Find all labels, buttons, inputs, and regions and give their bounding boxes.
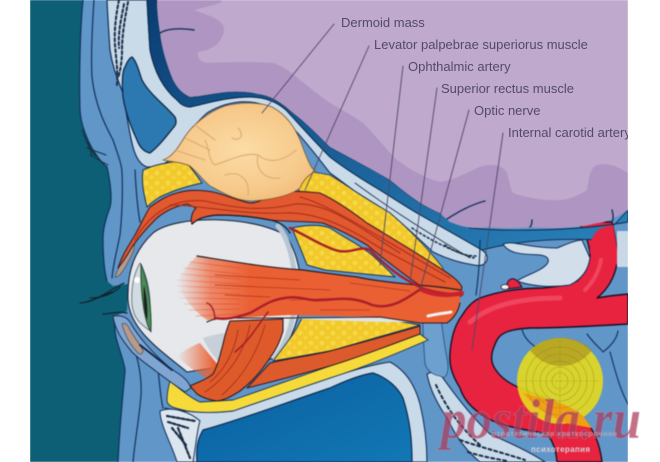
brain sulcus strokes — [160, 29, 613, 227]
dura band — [147, 0, 628, 250]
eyeball — [128, 220, 301, 372]
frontal sinus — [122, 57, 176, 153]
cornea and iris — [132, 263, 151, 332]
levator and superior rectus muscle — [118, 190, 462, 297]
label: Superior rectus muscle: Superior rectus muscle — [441, 81, 574, 96]
ophthalmic artery branches — [207, 228, 462, 352]
upper eyelashes — [80, 283, 124, 303]
fat between muscles, centre — [292, 225, 395, 277]
cancellous bone dots: clinoid — [412, 228, 476, 258]
watermark: postila.ru: postila.ru — [437, 389, 641, 451]
fan fibres — [177, 262, 240, 316]
bone inner line — [355, 183, 470, 258]
artery upper end over dura — [590, 225, 617, 264]
brain shading folds — [157, 0, 628, 228]
pituitary region lines — [476, 240, 628, 404]
lower lid — [113, 316, 191, 392]
sphenoid bone, lower — [427, 372, 545, 462]
lower eyelashes — [103, 312, 127, 314]
optic canal spike — [422, 323, 449, 378]
maxillary sinus — [197, 373, 412, 462]
label: Ophthalmic artery: Ophthalmic artery — [408, 59, 511, 74]
lateral rectus muscle — [177, 256, 460, 323]
sphenoid cancellous dots — [436, 385, 525, 461]
inferior rectus muscle — [247, 326, 420, 388]
skin layers: forehead and cheek — [80, 0, 163, 462]
label: Dermoid mass: Dermoid mass — [341, 15, 425, 30]
maxillary bone rim — [165, 362, 427, 462]
brain — [157, 0, 628, 228]
face exterior background — [30, 0, 128, 462]
fat under lateral rectus — [273, 318, 420, 361]
internal carotid artery — [450, 222, 628, 462]
lower left cancellous dots — [167, 416, 195, 458]
eyebrow hairs — [82, 130, 108, 165]
cancellous bone lower left — [160, 409, 200, 462]
watermark caption: bottom line: психотерапия — [531, 445, 590, 454]
yellow target watermark — [517, 338, 603, 428]
clinoid bone right — [503, 240, 590, 286]
watermark caption: top line: стратегическая краткосрочная — [492, 429, 617, 438]
dermoid mass — [163, 103, 316, 201]
label: Levator palpebrae superiorus muscle: Levator palpebrae superiorus muscle — [374, 37, 588, 52]
retrobulbar fat: upper right strip — [298, 172, 444, 270]
cancellous bone dots: frontal — [115, 0, 128, 85]
upper lid tarsus — [115, 241, 135, 277]
retrobulbar fat: upper left — [142, 162, 202, 207]
inferior oblique muscle — [190, 319, 283, 401]
retrobulbar fat: lower — [167, 334, 428, 412]
inferior oblique fan — [177, 343, 218, 380]
muscle fibres — [215, 275, 410, 310]
label: Optic nerve: Optic nerve — [474, 103, 540, 118]
label: Internal carotid artery: Internal carotid artery — [508, 125, 631, 140]
artery small branch — [507, 279, 522, 289]
artery highlight — [467, 258, 604, 325]
small white vessel tip — [501, 284, 509, 290]
leader lines — [262, 24, 503, 350]
skull bone, light — [107, 0, 487, 266]
